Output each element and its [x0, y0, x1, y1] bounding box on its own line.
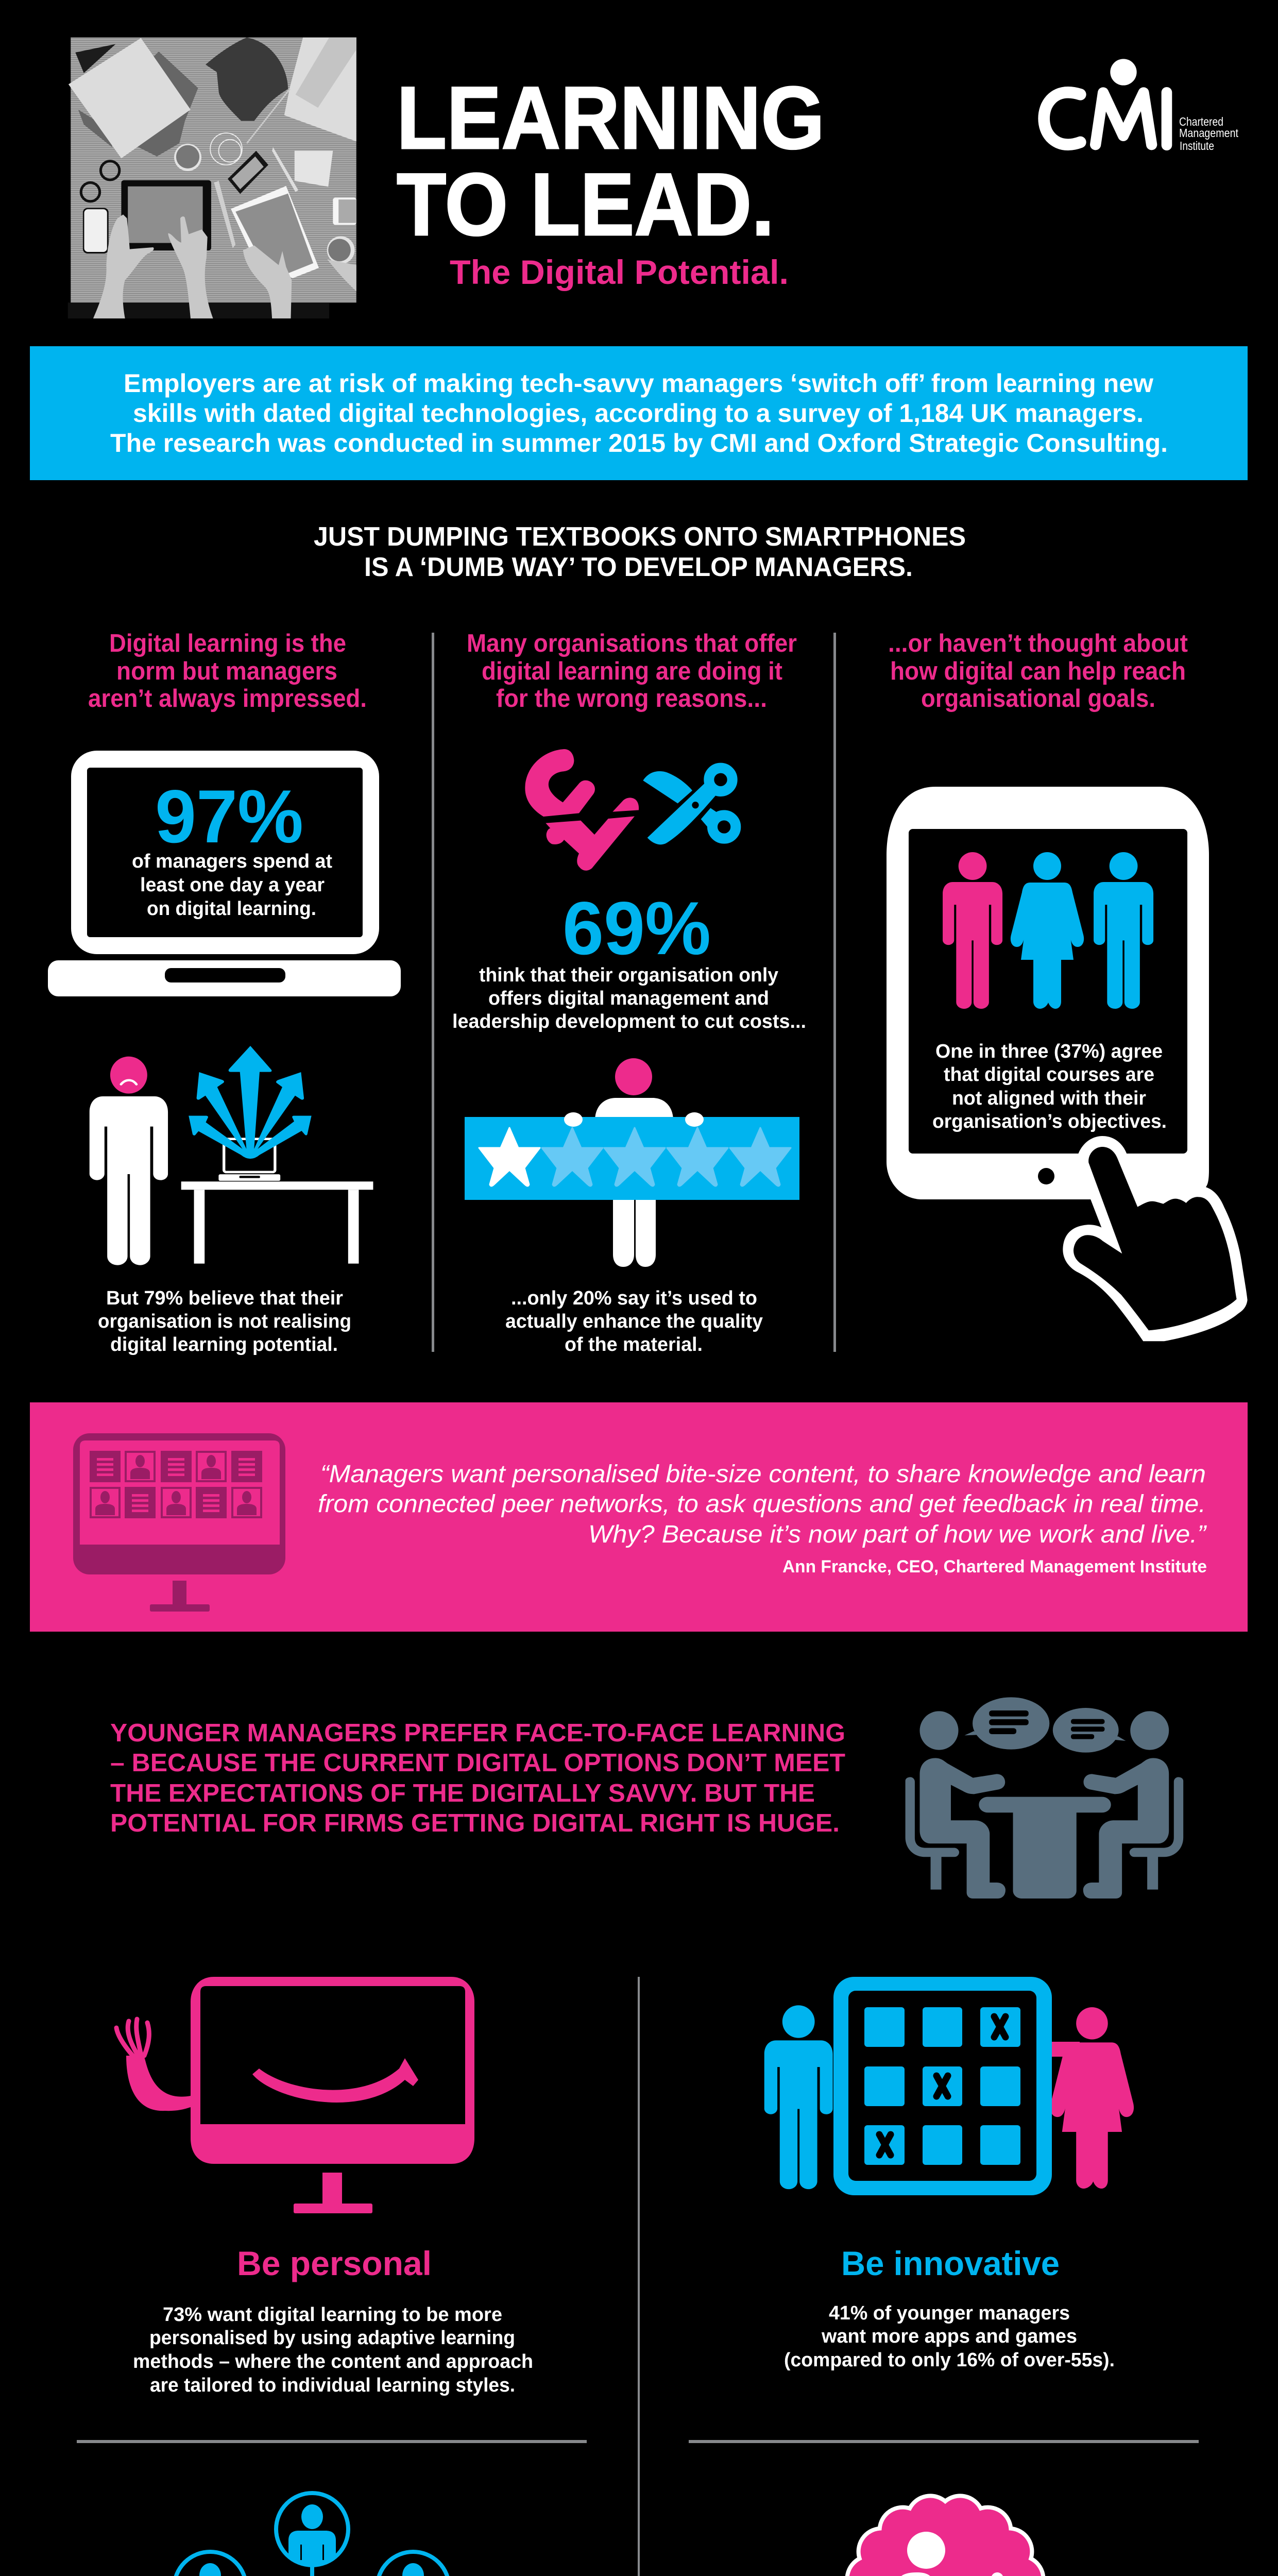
column 3 heading: ...or haven’t thought about — [888, 630, 1188, 657]
heading: be personal: Be personal — [237, 2244, 432, 2282]
panel: intro banner: Employers are at risk of making tech-savvy managers ‘switch off’ from learning new — [124, 369, 1153, 398]
text: 73% personalised — [133, 2304, 533, 2396]
panel: intro banner: skills with dated digital technologies, according to a survey of 1,184 UK managers. — [133, 399, 1144, 428]
text: only 20%: actually enhance the quality — [505, 1311, 763, 1332]
column 3 heading: organisational goals. — [921, 685, 1155, 713]
quote text: Why? Because it’s now part of how we work and live.” — [588, 1521, 1207, 1548]
icon: laptop with 97% stat — [48, 751, 401, 996]
title: LEARNING — [397, 69, 825, 167]
column 1 heading: Digital learning is the — [109, 630, 346, 657]
panel: intro banner: The research was conducted in summer 2015 by CMI and Oxford Strategic Consulting. — [110, 429, 1168, 457]
panel: be credible — [814, 2496, 1074, 2576]
icon: tablet with three people: that digital courses are — [944, 1064, 1154, 1086]
panel: column 2 — [452, 630, 806, 1355]
icon: tablet with three people: One in three (37%) agree — [935, 1041, 1163, 1062]
stat: 69% — [452, 886, 806, 1032]
text: 73% personalised: are tailored to individual learning styles. — [150, 2375, 515, 2396]
icon: laptop with 97% stat: 97% — [155, 774, 303, 858]
column 3 heading — [888, 630, 1188, 713]
subtitle: The Digital Potential. — [450, 253, 789, 291]
icon: person holding star rating banner — [465, 1058, 799, 1267]
icon: tablet with three people: organisation’s objectives. — [932, 1111, 1167, 1132]
heading: younger managers: YOUNGER MANAGERS PREFER FACE-TO-FACE LEARNING — [110, 1719, 845, 1747]
quote attribution: Ann Francke, CEO, Chartered Management Institute — [782, 1557, 1207, 1577]
column 1 heading: aren’t always impressed. — [88, 685, 367, 713]
icon: people with app tablet — [764, 1977, 1134, 2195]
heading: be innovative: Be innovative — [841, 2244, 1060, 2282]
text: 73% personalised: personalised by using adaptive learning — [149, 2327, 515, 2349]
panel: be innovative — [764, 1977, 1134, 2371]
icon: laptop with 97% stat: least one day a year — [140, 874, 325, 896]
icon: sad man at desk with arrows from laptop — [90, 1046, 373, 1265]
text: 41% apps and games — [784, 2302, 1115, 2371]
icon: smiling waving monitor — [116, 1977, 474, 2213]
column 1 heading — [88, 630, 367, 713]
title — [397, 69, 825, 254]
column 2 heading: digital learning are doing it — [482, 657, 782, 685]
text: only 20% — [505, 1287, 763, 1355]
text: 73% personalised: 73% want digital learning to be more — [163, 2304, 502, 2326]
heading: younger managers: THE EXPECTATIONS OF THE DIGITALLY SAVVY. BUT THE — [110, 1780, 815, 1807]
text: 79% believe: digital learning potential. — [110, 1334, 338, 1355]
text: 73% personalised: methods – where the content and approach — [133, 2351, 533, 2372]
heading: younger managers — [110, 1719, 845, 1837]
quote text: “Managers want personalised bite-size content, to share knowledge and learn — [320, 1461, 1206, 1488]
icon: tablet with three people — [887, 787, 1209, 1199]
text: 79% believe: organisation is not realising — [98, 1311, 351, 1332]
title: TO LEAD. — [397, 155, 774, 254]
heading: dumping textbooks: IS A ‘DUMB WAY’ TO DEVELOP MANAGERS. — [364, 552, 913, 582]
panel: column 1 — [48, 630, 401, 1355]
panel: intro banner — [30, 346, 1248, 480]
text: only 20%: ...only 20% say it’s used to — [511, 1287, 757, 1309]
column 3 heading: how digital can help reach — [890, 657, 1186, 685]
icon: tablet with three people: not aligned with their — [952, 1088, 1146, 1109]
column 2 heading — [467, 630, 797, 713]
icon: monitor with profile tiles — [73, 1433, 285, 1612]
quote text: from connected peer networks, to ask questions and get feedback in real time. — [318, 1490, 1206, 1518]
panel: be personal — [116, 1977, 533, 2396]
icon: award rosette — [847, 2496, 1044, 2576]
quote text — [318, 1461, 1207, 1548]
header photo: desk with tablets and hands — [68, 38, 356, 318]
stat: 69%: leadership development to cut costs... — [452, 1011, 806, 1032]
heading: younger managers: POTENTIAL FOR FIRMS GETTING DIGITAL RIGHT IS HUGE. — [110, 1809, 840, 1837]
text: 79% believe — [98, 1287, 351, 1355]
icon: pointing hand — [1063, 1136, 1248, 1341]
panel: column 3 — [887, 630, 1248, 1341]
text: 79% believe: But 79% believe that their — [106, 1287, 343, 1309]
icon: scissors cutting percent sign — [525, 749, 736, 871]
heading: younger managers: – BECAUSE THE CURRENT DIGITAL OPTIONS DON’T MEET — [110, 1749, 845, 1777]
panel: be social — [95, 2493, 548, 2576]
column 2 heading: Many organisations that offer — [467, 630, 797, 657]
stat: 69%: think that their organisation only — [479, 964, 778, 986]
icon: laptop with 97% stat: on digital learning. — [147, 898, 316, 920]
CMI logo — [1044, 59, 1239, 152]
text: 41% apps and games: want more apps and games — [821, 2326, 1077, 2347]
icon: laptop with 97% stat: of managers spend at — [132, 851, 332, 872]
icon: peer network — [174, 2493, 449, 2576]
heading: dumping textbooks — [314, 522, 966, 582]
heading: dumping textbooks: JUST DUMPING TEXTBOOKS ONTO SMARTPHONES — [314, 522, 966, 552]
text: 41% apps and games: 41% of younger managers — [829, 2302, 1070, 2324]
stat: 69%: 69% — [563, 886, 711, 970]
text: 41% apps and games: (compared to only 16% of over-55s). — [784, 2349, 1115, 2371]
CMI logo: Chartered — [1179, 115, 1223, 128]
text: only 20%: of the material. — [565, 1334, 703, 1355]
icon: two people meeting at table — [906, 1697, 1183, 1899]
stat: 69%: offers digital management and — [488, 988, 769, 1009]
column 1 heading: norm but managers — [116, 657, 337, 685]
column 2 heading: for the wrong reasons... — [496, 685, 767, 713]
CMI logo: Institute — [1180, 139, 1214, 152]
CMI logo: Management — [1179, 126, 1239, 140]
panel: quote from Ann Francke — [30, 1402, 1248, 1632]
